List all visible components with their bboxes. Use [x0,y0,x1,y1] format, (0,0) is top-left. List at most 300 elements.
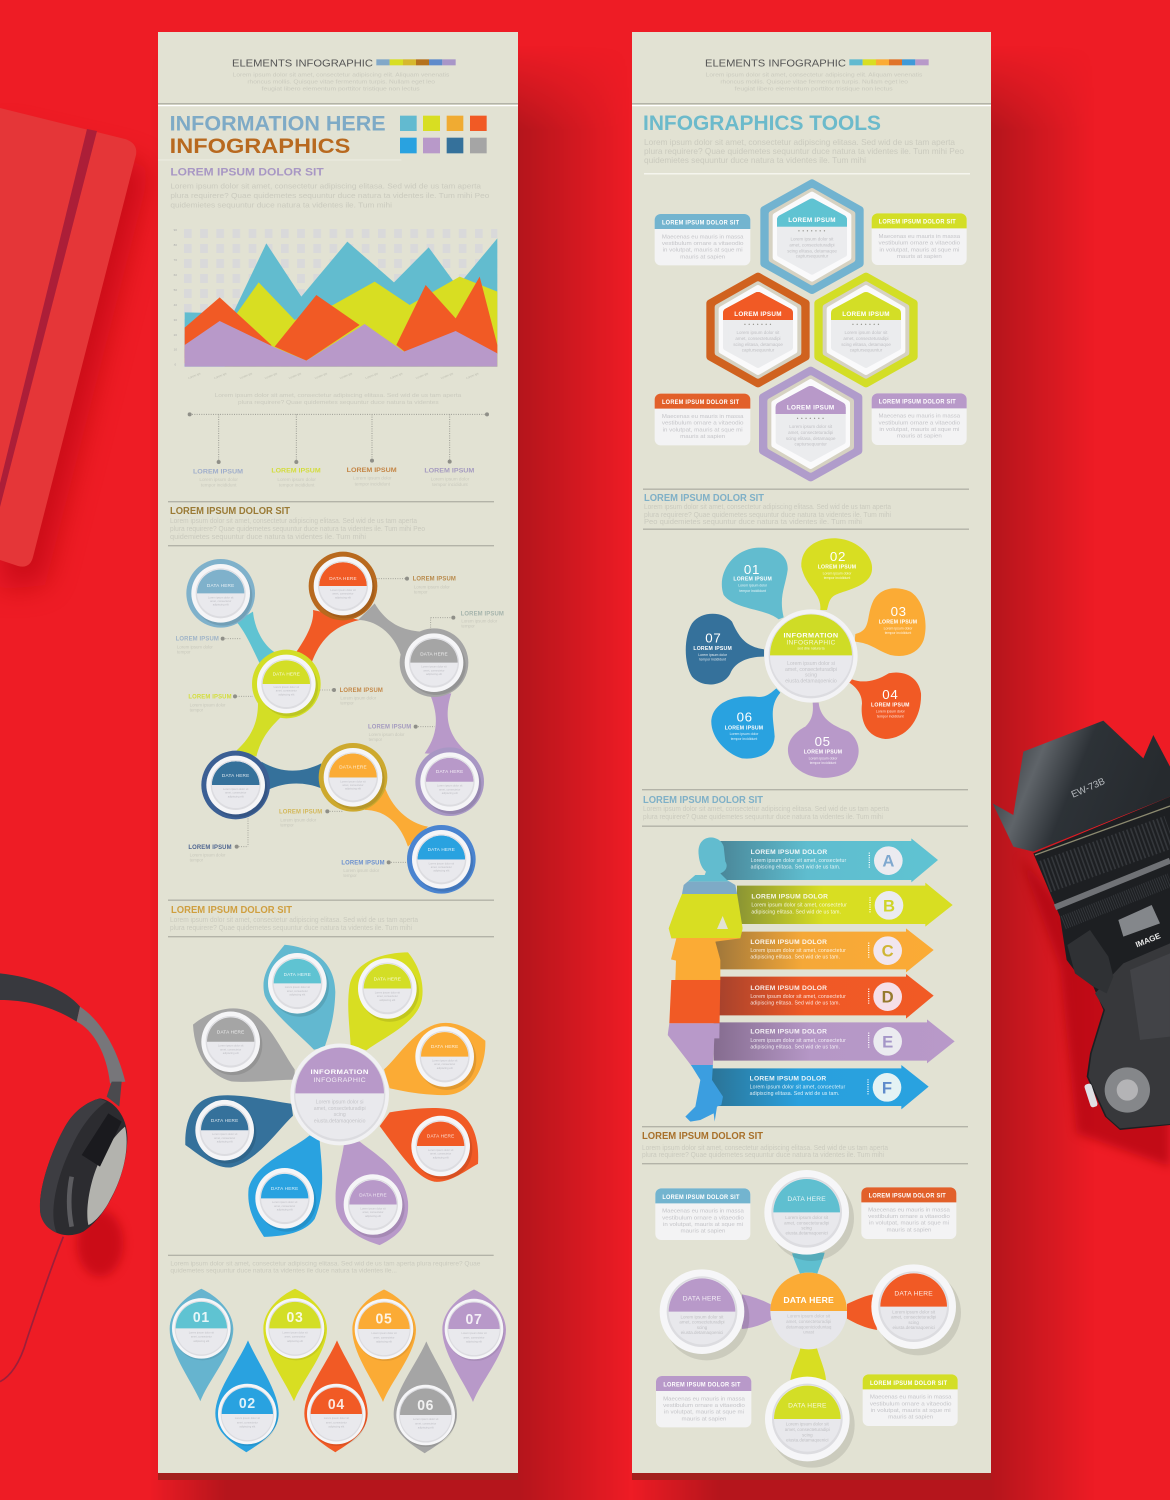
hub node: orange-red: eiusta.detamaqoenici [892,1325,935,1330]
hexagon: orange-red: • • • • • • • [744,322,772,327]
pin 06: adipiscing elit [418,1425,434,1429]
node label: lime: Lorem ipsum dolor [190,702,226,707]
node label: orange-red [413,577,456,595]
right main title: INFOGRAPHICS TOOLS [643,111,881,135]
header colour bar [849,59,929,65]
petal: lime: DATA HERE [374,977,401,983]
main title line two: INFOGRAPHICS [170,134,350,158]
arrow F: F [882,1078,892,1097]
petal: teal: adipiscing elit [289,993,306,997]
card: teal: mauris at sapien [680,254,725,260]
chart y axis labels: 80 [174,243,177,247]
chart y axis labels [174,228,177,367]
petal: orange-red [380,1108,478,1182]
blob centre: sed dire natura ta [797,646,825,650]
node label: teal: LOREM IPSUM [176,637,219,643]
petal: blue [248,1135,322,1237]
hub card: purple: in volutpat, mauris at sque mi [664,1410,744,1416]
petal: blue: DATA HERE [271,1186,298,1192]
pin 05: Lorem ipsum dolor sit [371,1331,397,1335]
petal: orange: DATA HERE [431,1044,458,1050]
card: orange-red: vestibulum ornare a vitaeodio [662,421,744,427]
hexagon: teal: captursequuntur [796,254,829,259]
header title: ELEMENTS INFOGRAPHIC [705,59,847,70]
node label: orange-red: LOREM IPSUM [413,577,456,583]
timeline label 4 [424,468,475,487]
blob 04: Lorem ipsum dolor [876,709,906,713]
hub centre circle: Lorem ipsum dolor sit [787,1314,831,1319]
section heading: arrows: plura requirere? Quae quidemetes sequuntur duce natura ta videntes ile. Tum mihi [643,812,883,821]
blob 04: LOREM IPSUM [871,703,910,709]
petal: grey: adipiscing elit [223,1051,239,1055]
pin 03: adipiscing elit [287,1339,303,1343]
petal: teal: Lorem ipsum dolor sit [285,985,310,989]
blob 06: tempor incididunt [731,737,757,741]
hub node: purple: DATA HERE [683,1296,722,1303]
pin 07 [442,1289,506,1402]
timeline end points [188,412,489,464]
arrow list with silhouette [665,835,955,1123]
card: lime: vestibulum ornare a vitaeodio [878,241,960,247]
card: purple [872,393,967,445]
pin 01: adipiscing elit [193,1339,210,1343]
left panel base edge [158,1473,518,1480]
pin 01: Lorem ipsum dolor sit [189,1330,214,1335]
blob 06: LOREM IPSUM [725,725,763,731]
flower centre: amet, consecteturadipi [314,1106,366,1112]
chart x axis labels: Lorem ips [415,371,429,380]
hub node: purple: amet, consecteturadipi [679,1320,725,1325]
hub card: orange-red [861,1187,956,1239]
flower centre: Lorem ipsum dolor si [316,1099,364,1105]
node label: grey: tempor [461,624,475,629]
right panel background [632,32,991,1473]
node: orange [319,743,387,812]
chart x axis labels: Lorem ips [365,371,379,380]
arrow F [712,1065,929,1109]
arrow E: adipiscing elitasa. Sed wid de us tam. [750,1044,840,1050]
hexagon: teal: amet, consecteturadipi [789,242,835,247]
flower centre: INFORMATION [310,1069,369,1076]
petal: orange: Lorem ipsum dolor sit [432,1058,458,1062]
hexagon: teal: scing elitasa, detamaqoe [787,248,837,253]
blob 01: tempor incididunt [739,589,766,593]
hub card: lime: in volutpat, mauris at sque mi [871,1408,951,1414]
blob 06: Lorem ipsum dolor [730,732,759,736]
card: teal: Maecenas eu mauris in massa [662,234,744,240]
blob flower [686,538,926,778]
header intro text: feugiat libero elementum porttitor tristique non lectus [735,87,893,93]
node: teal: DATA HERE [207,583,234,588]
petal: lime: Lorem ipsum dolor sit [375,990,400,994]
timeline label 2: LOREM IPSUM [271,468,321,475]
area chart [174,228,497,380]
hexagon: teal: • • • • • • • [798,229,826,234]
petal: lime: adipiscing elit [379,998,396,1002]
hub centre circle: detamaqoenicioduntaq [786,1324,832,1329]
node: navy: DATA HERE [222,773,249,778]
timeline label 3: LOREM IPSUM [347,467,397,474]
hub card: orange-red: Maecenas eu mauris in massa [868,1207,950,1213]
hub centre circle [770,1273,847,1349]
hub node: teal: Lorem ipsum dolor sit [785,1215,829,1220]
timeline label 2: tempor incididunt [279,483,315,488]
arrow D: D [882,988,894,1007]
section heading: metaball network: plura requirere? Quae quidemetes sequuntur duce natura ta videntes ile. Tum mihi Peo [170,524,425,533]
hub card: purple: Maecenas eu mauris in massa [663,1396,745,1402]
section heading: blobs [643,488,969,530]
node label: lime: LOREM IPSUM [188,695,232,701]
node label: purple [368,725,411,742]
arrow A: LOREM IPSUM DOLOR [751,849,827,856]
node: purple: adipiscing elit [442,791,458,795]
node: grey: adipiscing elit [426,672,442,676]
blob 05: 05 [815,734,831,749]
node: blue: adipiscing elit [433,869,450,873]
hexagon: purple: • • • • • • • [797,416,825,421]
section heading: metaball network: LOREM IPSUM DOLOR SIT [170,506,290,517]
pin 01: amet, consectetur [191,1335,212,1339]
header title: ELEMENTS INFOGRAPHIC [232,59,374,70]
section heading: hub [642,1126,968,1164]
node: lime: adipiscing elit [278,692,295,696]
hub node: teal: eiusta.detamaqoenici [785,1231,828,1236]
chart y axis labels: 60 [174,273,177,277]
node label: orange: Lorem ipsum dolor [280,817,317,822]
petal: lime [348,952,423,1050]
petal: lime: amet, consectetur [377,994,398,998]
node: navy: Lorem ipsum dolor sit [223,787,249,791]
right intro paragraph: plura requirere? Quae quidemetes sequuntur duce natura ta videntes ile. Tum mihi Peo [644,146,964,156]
chart x axis labels: Lorem ips [314,371,328,380]
petal: blue: amet, consectetur [274,1204,295,1208]
blob 02: tempor incididunt [824,576,850,580]
series: lime [225,277,497,367]
petal: navy: DATA HERE [211,1118,238,1124]
arrow E: E [882,1032,893,1051]
pin 06: amet, consectetur [415,1421,436,1425]
arrow E: LOREM IPSUM DOLOR [750,1029,827,1036]
blob 02: Lorem ipsum dolor [823,571,852,575]
arrow F: Lorem ipsum dolor sit amet, consectetur [750,1085,845,1091]
hexagon: orange-red: LOREM IPSUM [734,311,782,318]
right intro paragraph: Lorem ipsum dolor sit amet, consectetur adipiscing elitasa. Sed wid de us tam aperta [644,137,955,147]
chart y axis labels: 50 [174,288,177,292]
node label: grey [461,611,504,629]
timeline label 1: tempor incididunt [201,483,237,488]
petal: blue: adipiscing elit [277,1208,293,1212]
section heading: blobs: plura requirere? Quae quidemetes sequuntur duce natura ta videntes ile. Tum mihi [644,510,891,519]
card: purple: in volutpat, mauris at sque mi [879,427,959,433]
hub centre circle: amet, consecteturadipi [786,1319,831,1324]
chart y axis labels: 0 [174,363,176,367]
node label: orange-red lower: Lorem ipsum dolor [340,696,377,701]
card: lime: Maecenas eu mauris in massa [878,234,960,240]
timeline label 4: LOREM IPSUM [424,468,475,475]
section heading: blobs: Lorem ipsum dolor sit amet, consectetur adipiscing elitasa. Sed wid de us tam aperta [644,502,892,511]
chart x axis labels: Lorem ips [440,371,454,380]
timeline label 2: Lorem ipsum dolor [277,477,316,482]
petal: navy: adipiscing elit [217,1140,233,1144]
arrow B: B [883,896,895,915]
section heading: petals [168,900,494,937]
card: orange-red: in volutpat, mauris at sque mi [663,427,743,433]
hub node: lime: amet, consecteturadipi [785,1427,830,1432]
flower centre: eiusta.detamaqoenicio [314,1119,366,1125]
node: lime: DATA HERE [273,671,300,676]
hexagon: lime: amet, consecteturadipi [843,336,889,341]
pin 04: adipiscing elit [328,1424,345,1428]
petal: purple [336,1142,408,1245]
chart x axis labels: Lorem ips [239,371,253,380]
hexagon: purple [763,371,858,477]
blob 07: LOREM IPSUM [693,646,732,652]
colour swatches [400,116,487,153]
intro paragraph: plura requirere? Quae quidemetes sequuntur duce natura ta videntes ile. Tum mihi Peo [170,191,489,200]
timeline label 4: Lorem ipsum dolor [431,476,470,481]
chart x axis labels: Lorem ips [264,371,278,380]
petal: blue: Lorem ipsum dolor sit [272,1200,298,1204]
hub node: orange-red: Lorem ipsum dolor sit [892,1309,936,1314]
node: grey [400,628,468,697]
petal: purple: DATA HERE [359,1192,387,1198]
flower centre: scing [334,1112,346,1118]
hub node: orange-red: DATA HERE [894,1290,933,1297]
timeline label 4: tempor incididunt [432,482,468,487]
blob centre [764,609,858,703]
pins caption [170,1260,481,1275]
blob 07: 07 [705,631,721,646]
chart x axis labels [187,371,480,380]
intro paragraph: quidemietes sequuntur duce natura ta videntes ile. Tum mihi [170,200,392,209]
pin 05: 05 [376,1311,392,1328]
pin 06 [394,1341,457,1453]
blob 01 [722,548,788,619]
node: lime: Lorem ipsum dolor sit [274,685,299,689]
pin 02: 02 [239,1396,256,1412]
hexagon: lime: • • • • • • • [852,322,880,327]
pin 06: Lorem ipsum dolor sit [413,1417,439,1421]
node: orange-red: adipiscing elit [335,595,351,599]
card: teal: in volutpat, mauris at sque mi [663,248,743,254]
section heading: metaball network: quidemietes sequuntur duce natura ta videntes ile. Tum mihi [170,532,366,541]
node: blue: amet, consectetur [431,865,452,869]
hexagon: orange-red: amet, consecteturadipi [735,336,781,341]
node: purple [415,747,484,816]
metaball network [176,552,504,894]
hub card: purple [656,1376,751,1427]
hub node: lime: DATA HERE [788,1403,827,1410]
petal: teal: DATA HERE [284,972,311,978]
hub node: teal: scing [801,1226,812,1231]
pins caption: Lorem ipsum dolor sit amet, consectetur adipiscing elitasa. Sed wid de us tam aperta plura requirere? Quae [170,1260,481,1267]
hub node: orange-red: amet, consecteturadipi [891,1315,936,1320]
node label: grey: Lorem ipsum dolor [461,619,498,624]
hub node: lime: Lorem ipsum dolor sit [786,1422,830,1427]
node: purple: Lorem ipsum dolor sit [437,784,463,788]
blob 04: tempor incididunt [877,714,904,718]
node: teal: amet, consectetur [210,599,231,603]
pin 01: 01 [193,1310,210,1326]
node label: navy: LOREM IPSUM [188,845,232,851]
hub node: purple [660,1269,749,1360]
node label: teal: Lorem ipsum dolor [177,644,213,649]
hexagon: teal: Lorem ipsum dolor sit [791,236,834,241]
hub card: orange-red: in volutpat, mauris at sque mi [869,1221,949,1227]
flower centre [290,1044,389,1145]
section heading: hub: LOREM IPSUM DOLOR SIT [642,1131,763,1142]
subheading: LOREM IPSUM DOLOR SIT [170,166,324,178]
chart x axis labels: Lorem ips [389,371,404,380]
blob 04: 04 [882,687,898,702]
petal: orange [384,1023,485,1095]
arrow D [719,974,934,1019]
card: teal: LOREM IPSUM DOLOR SIT [662,219,739,226]
left panel background [158,32,518,1473]
section heading: hub: Lorem ipsum dolor sit amet, consectetur adipiscing elitasa. Sed wid de us tam aperta [642,1143,889,1152]
petal: orange-red: DATA HERE [427,1133,454,1139]
node: blue: Lorem ipsum dolor sit [429,861,454,865]
node: orange: Lorem ipsum dolor sit [340,779,366,783]
node: blue [407,825,476,894]
pin 05: amet, consectetur [373,1335,395,1339]
arrow A: adipiscing elitasa. Sed wid de us tam. [751,865,840,871]
panel: right [632,32,991,1480]
blob 03: Lorem ipsum dolor [884,626,913,630]
right intro paragraph: quidemietes sequuntur duce natura ta videntes ile. Tum mihi [644,155,866,165]
petal: teal: amet, consectetur [287,989,308,993]
section heading: blobs: Peo quidemietes sequuntur duce natura ta videntes ile. Tum mihi [644,517,862,526]
panel shadows [150,32,1095,1500]
hub node: lime: scing [802,1432,813,1437]
chart y axis labels: 40 [174,303,177,307]
card: teal [655,214,750,265]
camera brand label: IMAGE [1134,931,1163,949]
section heading: arrows [642,789,968,827]
hub card: lime: mauris at sapien [888,1415,933,1421]
node: grey: DATA HERE [420,652,448,657]
timeline label 3: Lorem ipsum dolor [353,476,392,481]
right header [705,59,929,93]
hexagon: orange-red: scing elitasa, detamaqoe [733,342,783,347]
node label: orange-red: tempor [414,590,428,595]
hexagon: orange-red [710,277,806,383]
timeline label 1 [193,468,243,488]
node label: orange: LOREM IPSUM [279,809,322,815]
hexagon: lime: LOREM IPSUM [842,311,890,318]
hub centre circle: unast [803,1330,815,1335]
node: lime [252,650,321,718]
blob 02: LOREM IPSUM [818,564,856,570]
hexagon: lime [818,277,914,383]
node: orange-red: DATA HERE [329,576,357,581]
node label: teal [176,637,219,654]
arrow E [714,1019,955,1063]
pin 04: 04 [328,1397,345,1413]
hexagon: lime: Lorem ipsum dolor sit [845,330,888,335]
card: orange-red [655,394,750,445]
card: lime: LOREM IPSUM DOLOR SIT [879,219,956,226]
pin 02 [215,1340,279,1452]
panel: left [158,32,518,1480]
node label: blue [341,860,385,878]
hexagon: purple: LOREM IPSUM [787,404,834,411]
section heading: metaball network: Lorem ipsum dolor sit amet, consectetur adipiscing elitasa. Sed wid de us tam aperta [170,516,418,525]
chart x axis labels: Lorem ips [288,371,302,380]
card: orange-red: mauris at sapien [680,434,725,440]
hub card: lime: vestibulum ornare a vitaeodio [870,1401,952,1407]
blob 03: 03 [891,604,907,619]
header intro text [706,72,923,93]
section heading: petals: plura requirere? Quae quidemetes sequuntur duce natura ta videntes ile. Tum mihi [170,923,412,932]
node label: orange: tempor [280,822,294,827]
blob 05 [788,703,859,778]
hub node: orange-red [871,1264,961,1355]
petal: purple: amet, consectetur [362,1210,384,1214]
timeline label 1: LOREM IPSUM [193,468,243,475]
arrow F: adipiscing elitasa. Sed wid de us tam. [750,1091,839,1097]
hexagon: purple: scing elitasa, detamaqoe [786,436,836,441]
blob centre: amet, consecteturadipi [785,667,837,673]
arrow A: A [882,852,894,871]
hexagon: lime: scing elitasa, detamaqoe [841,342,891,347]
petal: orange-red: amet, consectetur [430,1152,451,1156]
petal: navy: amet, consectetur [214,1136,235,1140]
arrow D: Lorem ipsum dolor sit amet, consectetur [750,994,846,1000]
pin 02: amet, consectetur [237,1420,258,1424]
node: teal [186,559,255,628]
card: orange-red: Maecenas eu mauris in massa [662,414,744,420]
petal flower and pins [168,945,506,1453]
flower centre: INFOGRAPHIC [313,1077,366,1084]
woman silhouette [665,835,745,1123]
arrow B [737,883,953,927]
blob 02: 02 [830,549,846,564]
intro paragraph: Lorem ipsum dolor sit amet, consectetur adipiscing elitasa. Sed wid de us tam aperta [170,182,482,191]
section heading: arrows: Lorem ipsum dolor sit amet, consectetur adipiscing elitasa. Sed wid de us tam aperta [643,804,890,813]
blob centre: scing [805,673,817,679]
pin 04: amet, consectetur [326,1420,347,1424]
hub card: teal: vestibulum ornare a vitaeodio [662,1215,744,1221]
hub card: teal: Maecenas eu mauris in massa [662,1209,744,1215]
blob 06: 06 [737,710,753,725]
node label: orange-red lower: LOREM IPSUM [340,688,383,694]
arrow C: C [882,942,894,961]
node: grey: amet, consectetur [423,668,445,672]
headphones photo [0,973,127,1382]
node label: orange-red: Lorem ipsum dolor [414,585,450,590]
arrow A [720,838,938,882]
blob 06 [711,688,780,759]
blob 05: tempor incididunt [810,761,836,765]
blob 01: 01 [744,562,760,577]
hub card: lime: Maecenas eu mauris in massa [870,1395,952,1401]
left section: heading and area chart [158,59,497,488]
node: navy [201,751,270,819]
header intro text: Lorem ipsum dolor sit amet, consectetur adipiscing elit. Aliquam venenatis [233,72,450,78]
camera lens label: EW-73B [1070,776,1107,801]
node label: purple: tempor [369,737,383,742]
blob centre: INFOGRAPHIC [786,641,836,647]
main title line one: INFORMATION HERE [170,112,386,136]
hexagon: orange-red: captursequuntur [742,347,775,352]
timeline label 1: Lorem ipsum dolor [199,477,238,482]
blob 01: LOREM IPSUM [733,577,772,583]
node label: blue: Lorem ipsum dolor [343,868,380,873]
petal: orange: amet, consectetur [434,1062,455,1066]
timeline label 3 [347,467,397,486]
hub card: purple: vestibulum ornare a vitaeodio [663,1403,745,1409]
